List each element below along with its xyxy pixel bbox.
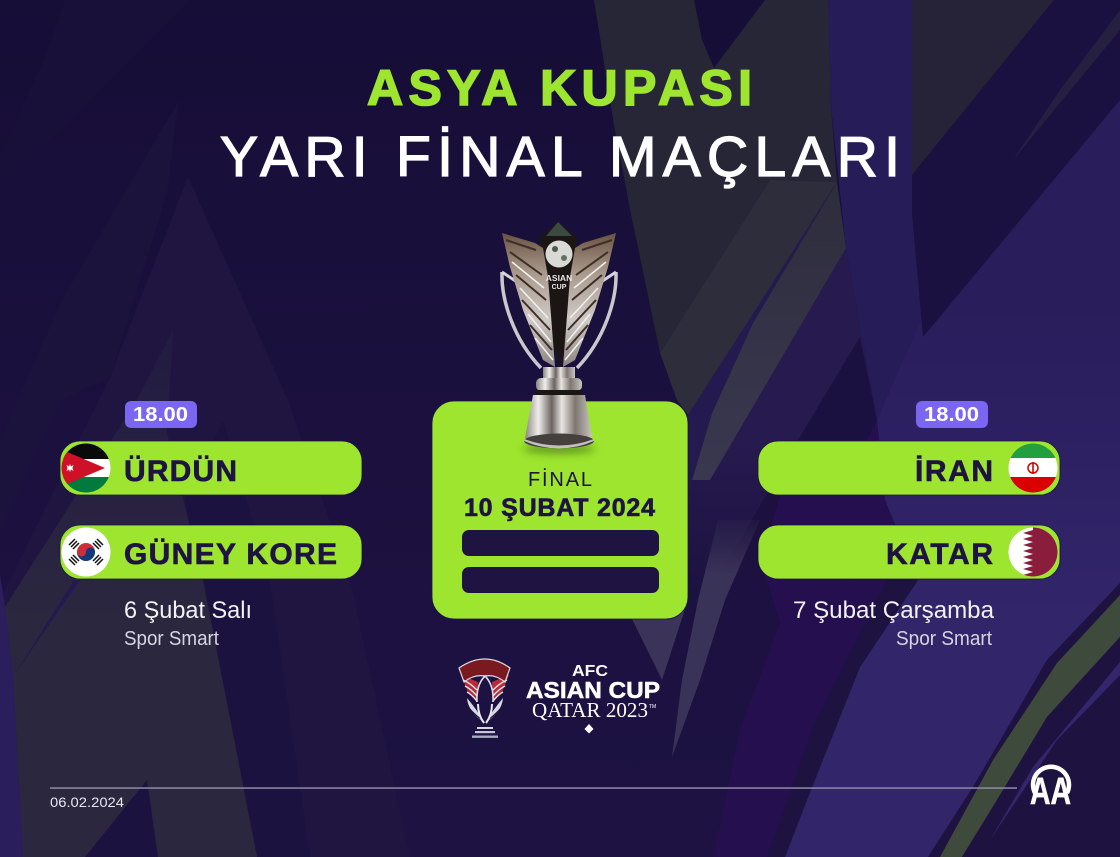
final date: 10 ŞUBAT 2024 (464, 494, 655, 522)
time badge right: 18.00 (924, 404, 979, 426)
logo: AFC Asian Cup: AFC (572, 663, 608, 680)
team name: İRAN (915, 455, 993, 488)
time badge right (916, 401, 988, 428)
logo: AA: AA (1030, 771, 1071, 813)
final label: FİNAL (528, 468, 592, 491)
match info left: Spor Smart (124, 627, 219, 650)
logo: AFC Asian Cup: ASIAN CUP (526, 677, 660, 703)
match info left (124, 597, 252, 650)
logo: AFC Asian Cup: QATAR 2023 (532, 698, 648, 722)
trophy: CUP (552, 284, 567, 291)
date: 06.02.2024 (50, 794, 124, 810)
match info right: Spor Smart (896, 627, 992, 650)
logo: AA (1030, 767, 1071, 813)
team name: ÜRDÜN (124, 455, 237, 488)
trophy (502, 222, 616, 454)
logo trophy mark (459, 659, 510, 738)
team: Ürdün (60, 441, 362, 495)
panel: final (432, 401, 688, 619)
team: Katar (758, 525, 1062, 579)
trophy: ASIAN (546, 273, 572, 283)
match info right: 7 Şubat Çarşamba (793, 597, 995, 624)
title: YARI FİNAL MAÇLARI: YARI FİNAL MAÇLARI (220, 125, 900, 189)
footer divider (50, 787, 1017, 789)
flag: Jordan (60, 443, 112, 494)
flag: Iran (1008, 444, 1058, 492)
flag: South Korea (62, 528, 110, 576)
match info right (793, 597, 995, 650)
time badge left (125, 401, 197, 428)
team name: KATAR (886, 538, 993, 571)
team name: GÜNEY KORE (124, 538, 337, 571)
finalist slot 1 (462, 530, 659, 556)
logo: AFC Asian Cup (459, 659, 660, 738)
team: İran (758, 441, 1061, 495)
finalist slot 2 (462, 567, 659, 593)
flag: Qatar (1008, 528, 1058, 576)
match info left: 6 Şubat Salı (124, 597, 252, 624)
title: ASYA KUPASI: ASYA KUPASI (367, 60, 752, 116)
team: Güney Kore (60, 525, 362, 579)
time badge left: 18.00 (133, 404, 188, 426)
logo: AFC Asian Cup: TM (649, 704, 656, 710)
